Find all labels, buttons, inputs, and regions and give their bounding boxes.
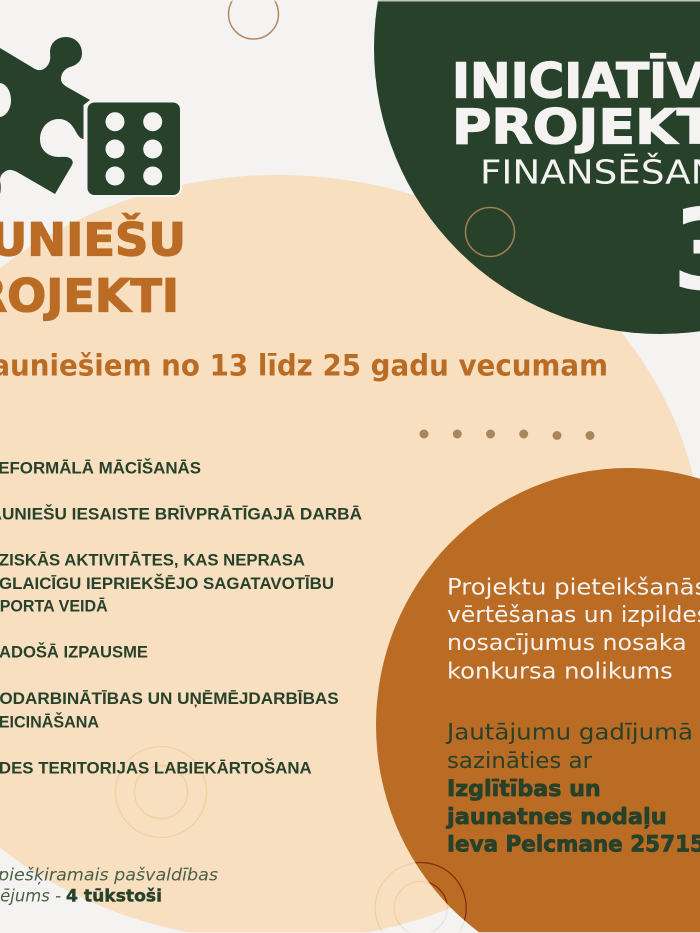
decorative ring: top [228,0,278,39]
panel: green circle [374,0,700,334]
text: contact [445,719,700,858]
heading: initiative projects [452,54,700,191]
text: contact: sazināties ar [447,748,593,774]
note: funding amount: 4 tūkstoši [66,887,162,906]
decorative dots [420,430,594,440]
note: funding amount: piešķiramais pašvaldības [0,866,218,885]
text: contact: jaunatnes nodaļu [446,805,667,830]
decorative ring: on green circle [466,208,514,256]
panel: orange circle [376,468,700,933]
text: application conditions: Projektu pieteikšanās, [447,574,700,600]
text: contact: Izglītības un [447,777,601,802]
list of project themes [0,458,362,777]
note: funding amount [0,866,218,906]
decorative double ring: bottom, over background [375,862,466,933]
subheading: audience: Jauniešiem no 13 līdz 25 gadu vecumam [0,349,608,383]
decorative double ring: bottom, over orange [415,862,467,921]
text: contact: Jautājumu gadījumā [445,719,693,745]
text: application conditions [447,574,700,684]
icon: dice [86,102,181,196]
text: application conditions: nosacījumus nosaka [447,630,687,656]
text: application conditions: vērtēšanas un izpildes [447,602,700,628]
decorative double ring: list [116,746,206,838]
icon: puzzle piece [0,37,90,194]
decorative double ring: bottom, over peach [374,862,448,930]
heading: youth projects [0,213,186,323]
text: application conditions: konkursa nolikums [447,658,673,684]
